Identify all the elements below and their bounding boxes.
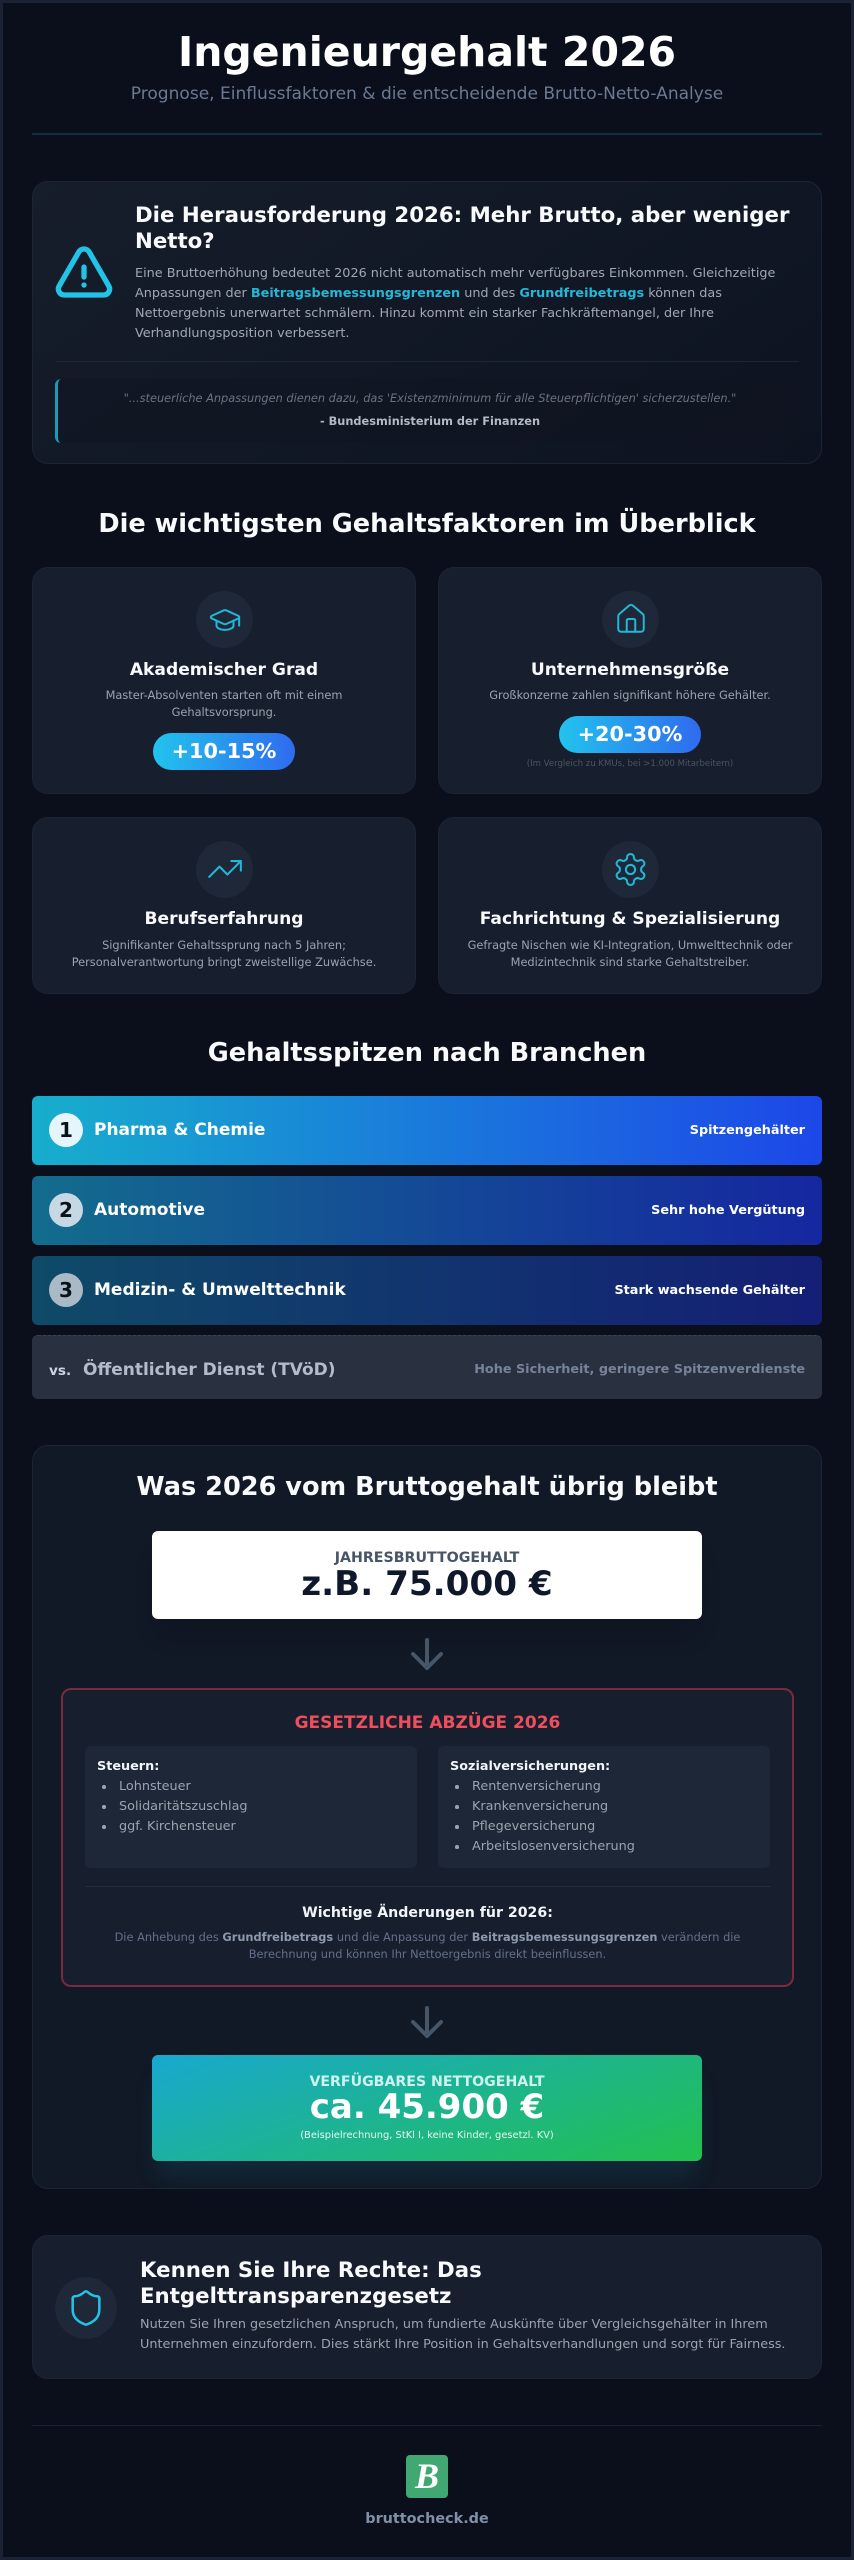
card title: Berufserfahrung [144,909,304,929]
industry name: Öffentlicher Dienst (TVöD) [83,1360,336,1380]
body text: Nettoergebnis unerwartet schmälern. Hinzu kommt ein starker Fachkräftemangel, der Ihre [135,306,714,321]
changes text: Die Anhebung des Grundfreibetrags und die Anpassung der Beitragsbemessungsgrenzen verändern die [115,1930,740,1944]
rights text: Unternehmen einzufordern. Dies stärkt Ihre Position in Gehaltsverhandlungen und sorgt für Fairness. [140,2337,785,2352]
badge [559,716,701,753]
card title: Fachrichtung & Spezialisierung [480,909,780,929]
gross label: JAHRESBRUTTOGEHALT [335,1550,519,1566]
heading: Branchen: Gehaltsspitzen nach Branchen [208,1038,646,1068]
social list [455,1779,635,1854]
deductions box [61,1688,794,1987]
net footnote: (Beispielrechnung, StKl I, keine Kinder, gesetzl. KV) [300,2130,554,2141]
card title: Unternehmensgröße [531,660,729,680]
badge [153,733,295,770]
quote block [55,379,799,443]
card: Berufserfahrung [32,817,416,994]
icon: shield [55,2277,117,2339]
title: Ingenieurgehalt 2026 [178,28,676,76]
card text: Medizintechnik sind starke Gehaltstreiber. [511,955,749,969]
card text: Gefragte Nischen wie KI-Integration, Umwelttechnik oder [468,938,792,952]
logo [406,2455,448,2498]
panel heading: Was 2026 vom Bruttogehalt übrig bleibt [136,1472,718,1502]
social list: Rentenversicherung [472,1779,601,1794]
rank badge: 3 [59,1278,73,1302]
social list: Arbeitslosenversicherung [472,1839,635,1854]
changes heading: Wichtige Änderungen für 2026: [302,1905,553,1921]
card title: Akademischer Grad [130,660,318,680]
rights text [140,2317,785,2352]
brand name: bruttocheck.de [365,2511,489,2527]
social heading: Sozialversicherungen: [450,1759,610,1774]
rank badge [49,1113,83,1147]
net salary box [152,2055,702,2161]
rank badge [49,1273,83,1307]
card text [106,688,342,719]
icon: graduation cap [196,591,253,648]
card text: Großkonzerne zahlen signifikant höhere Gehälter. [489,688,771,702]
net label: VERFÜGBARES NETTOGEHALT [309,2074,545,2090]
body text: Verhandlungsposition verbessert. [135,326,349,341]
bar: Automotive [32,1176,822,1245]
rank badge: 2 [59,1198,73,1222]
industry name: Pharma & Chemie [94,1120,265,1140]
card text: Signifikanter Gehaltssprung nach 5 Jahren; [102,938,346,952]
industry name: Medizin- & Umwelttechnik [94,1280,346,1300]
tax list: Solidaritätszuschlag [119,1799,248,1814]
heading [135,203,790,254]
card: Akademischer Grad [32,567,416,794]
deductions heading: GESETZLICHE ABZÜGE 2026 [295,1713,560,1733]
bar: Öffentlicher Dienst [32,1335,822,1399]
tax list: Lohnsteuer [119,1779,191,1794]
bar: Pharma & Chemie [32,1096,822,1165]
body text: Anpassungen der Beitragsbemessungsgrenzen und des Grundfreibetrags können das [135,286,722,301]
icon: warning triangle [56,246,112,298]
net amount: ca. 45.900 € [310,2087,544,2127]
card text [468,938,792,969]
inner divider [85,1886,771,1887]
rank badge [49,1193,83,1227]
heading: Die Herausforderung 2026: Mehr Brutto, aber weniger [135,203,789,228]
tax list [102,1779,248,1834]
card: Fachrichtung [438,817,822,994]
label: Hohe Sicherheit, geringere Spitzenverdienste [474,1362,805,1377]
icon: house [602,591,659,648]
bar: Medizin- & Umwelttechnik [32,1256,822,1325]
social insurance box [438,1746,770,1868]
panel: Herausforderung [32,181,822,464]
quote text: "...steuerliche Anpassungen dienen dazu, das 'Existenzminimum für alle Steuerpflichtigen' sicherzustellen." [124,391,736,405]
label: Stark wachsende Gehälter [614,1283,805,1298]
gross amount: z.B. 75.000 € [301,1564,553,1604]
header divider [32,133,822,135]
icon: trending up [196,841,253,898]
rank badge: 1 [59,1118,73,1142]
changes text: Berechnung und können Ihr Nettoergebnis direkt beeinflussen. [249,1946,606,1960]
card text [72,938,376,969]
badge: +10-15% [172,739,276,763]
heading: Gehaltsfaktoren: Die wichtigsten Gehaltsfaktoren im Überblick [98,509,756,539]
panel: Entgelttransparenzgesetz [32,2235,822,2379]
card: Unternehmensgröße [438,567,822,794]
badge: +20-30% [578,722,682,746]
tax list: ggf. Kirchensteuer [119,1819,236,1834]
label: Sehr hohe Vergütung [651,1203,805,1218]
tax box [85,1746,417,1868]
logo: B [415,2456,439,2496]
label: Spitzengehälter [690,1123,805,1138]
rights heading: Kennen Sie Ihre Rechte: Das [140,2258,482,2283]
card text: Personalverantwortung bringt zweistellige Zuwächse. [72,955,376,969]
heading: Netto? [135,229,215,254]
rights text: Nutzen Sie Ihren gesetzlichen Anspruch, um fundierte Auskünfte über Vergleichsgehälter in Ihrem [140,2317,768,2332]
social list: Pflegeversicherung [472,1819,595,1834]
arrow [411,2006,443,2038]
icon: gear [602,841,659,898]
body text: Eine Bruttoerhöhung bedeutet 2026 nicht automatisch mehr verfügbares Einkommen. Gleichzeitige [135,266,775,281]
footnote: (Im Vergleich zu KMUs, bei >1.000 Mitarbeitern) [527,759,733,769]
card text: Gehaltsvorsprung. [172,705,276,719]
industry name: Automotive [94,1200,205,1220]
inner divider [55,361,799,362]
social list: Krankenversicherung [472,1799,608,1814]
changes text [115,1930,740,1960]
quote source: - Bundesministerium der Finanzen [320,414,540,428]
subtitle: Prognose, Einflussfaktoren & die entscheidende Brutto-Netto-Analyse [131,84,723,104]
panel: Brutto-Netto [32,1445,822,2189]
card text: Master-Absolventen starten oft mit einem [106,688,342,702]
gross salary box [152,1531,702,1619]
rights heading: Entgelttransparenzgesetz [140,2284,451,2309]
rights heading [140,2258,482,2309]
tax heading: Steuern: [97,1759,159,1774]
body text [135,266,775,341]
vs label: vs. [49,1363,71,1379]
footer divider [32,2425,822,2426]
arrow [410,1638,443,1670]
